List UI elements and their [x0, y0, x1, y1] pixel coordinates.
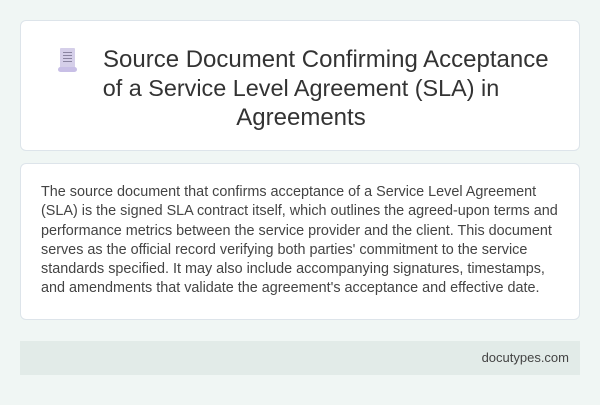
text block: standards specified. It may also include accompanying signatures, timestamps, — [41, 261, 545, 277]
title: of a Service Level Agreement (SLA) in — [103, 75, 499, 101]
panel: title — [20, 20, 580, 151]
title: Agreements — [236, 104, 366, 131]
text block: The source document that confirms acceptance of a Service Level Agreement — [41, 184, 536, 200]
footer text: docutypes.com — [482, 350, 569, 365]
icon: document scroll — [58, 48, 77, 72]
panel: description — [20, 163, 580, 320]
text block: performance metrics between the service provider and the client. This document — [41, 223, 552, 239]
title: Source Document Confirming Acceptance — [103, 46, 549, 73]
text block: and amendments that validate the agreement's acceptance and effective date. — [41, 280, 540, 296]
footer — [20, 341, 580, 375]
title — [103, 46, 549, 131]
text block — [41, 184, 558, 296]
text block: serves as the official record verifying both parties' commitment to the service — [41, 242, 527, 258]
text block: (SLA) is the signed SLA contract itself, which outlines the agreed-upon terms and — [41, 203, 558, 219]
